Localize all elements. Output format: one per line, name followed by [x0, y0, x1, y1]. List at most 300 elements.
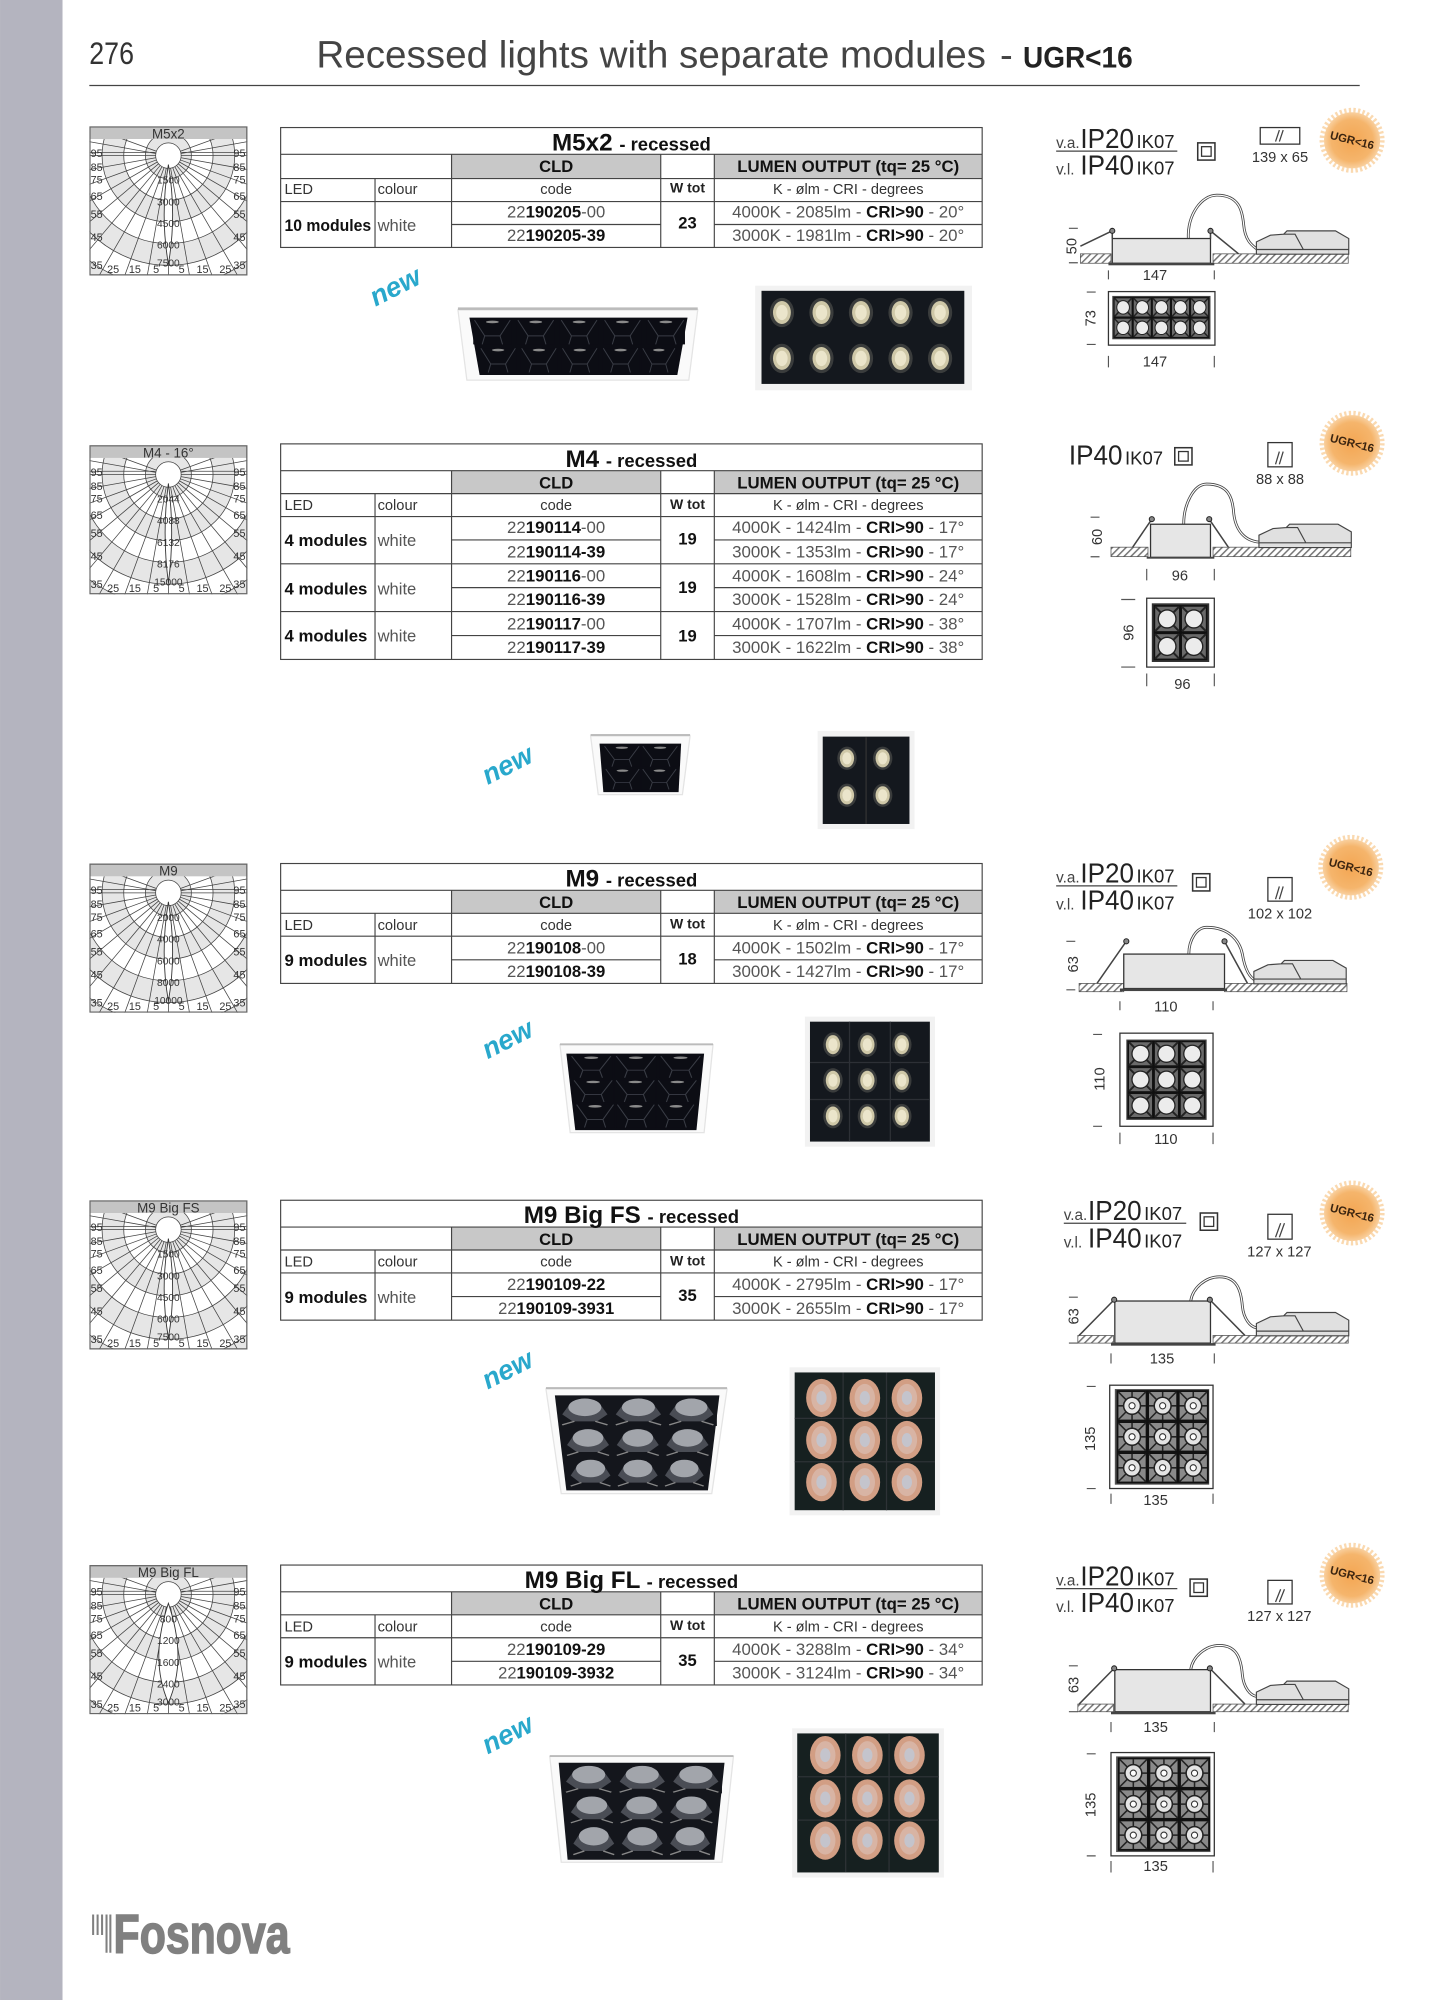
table: M4: 3000K - 1528lm - CRI>90 - 24°: [732, 590, 964, 609]
polar diagram: M5x2: 65: [91, 191, 103, 203]
polar diagram: M5x2: 25: [219, 264, 231, 276]
protection ratings: M9 Big FS: IK07: [1144, 1230, 1182, 1251]
polar diagram: M9 Big FS: [0, 1055, 344, 1405]
polar diagram: M5x2: 55: [91, 209, 103, 221]
polar diagram: M9 Big FS: 5: [153, 1338, 159, 1350]
table: M4: 22190116-00: [507, 567, 605, 586]
table: M5x2: code: [540, 182, 572, 198]
badge: UGR<16: UGR<16: [1329, 1203, 1375, 1225]
polar diagram: M9 Big FS: 55: [91, 1283, 103, 1295]
polar diagram: M9: 5: [179, 1001, 185, 1013]
polar diagram: M5x2: 95: [233, 148, 245, 160]
cut-out: M5x2: [1252, 128, 1308, 166]
protection ratings: M9: IP40: [1080, 884, 1134, 915]
polar diagram: M9 Big FL: 25: [219, 1703, 231, 1715]
polar diagram: M9 Big FS: 25: [107, 1338, 119, 1350]
polar diagram: M9 Big FS: 85: [233, 1236, 245, 1248]
photo: M4 side: [591, 734, 690, 795]
polar diagram: M5x2: 75: [91, 175, 103, 187]
polar diagram: M5x2: 1500: [157, 176, 180, 187]
side drawing: M4: 60: [1090, 529, 1106, 545]
polar diagram: M9 Big FS: M9 Big FS: [137, 1200, 200, 1215]
polar diagram: M5x2: M5x2: [152, 126, 185, 141]
top drawing: M5x2: 147: [1143, 355, 1167, 371]
polar diagram: M5x2: 85: [91, 162, 103, 174]
polar diagram: M9 Big FL: 1600: [157, 1658, 180, 1669]
polar diagram: M4: 15: [129, 583, 141, 595]
table: M9: M9 - recessed: [565, 865, 697, 892]
polar diagram: M9 Big FL: 5: [153, 1703, 159, 1715]
table: M9 Big FS: [281, 1200, 982, 1320]
cut-out: M9 Big FL: [1247, 1580, 1312, 1625]
polar diagram: M5x2: [0, 0, 344, 332]
protection ratings: M4: IP40: [1069, 439, 1122, 470]
polar diagram: M9 Big FL: 45: [91, 1671, 103, 1683]
side band: [0, 0, 63, 2000]
cut-out: M4: [1256, 443, 1304, 488]
polar diagram: M4: 5: [179, 583, 185, 595]
table: M9: 9 modules: [284, 951, 367, 970]
table: M9: code: [540, 918, 572, 934]
polar diagram: M9: 35: [91, 997, 103, 1009]
top drawing: M9: 110: [1093, 1067, 1109, 1091]
polar diagram: M4: 95: [91, 467, 103, 479]
polar diagram: M4: 25: [219, 583, 231, 595]
table: M4: LUMEN OUTPUT (tq= 25 °C): [737, 474, 959, 493]
photo: M9 Big FS side: [546, 1387, 727, 1494]
table: M9 Big FL: 3000K - 3124lm - CRI>90 - 34°: [732, 1664, 964, 1683]
top drawing: M4: [1121, 598, 1214, 693]
table: M4: 4000K - 1608lm - CRI>90 - 24°: [732, 567, 964, 586]
polar diagram: M9 Big FS: 65: [233, 1265, 245, 1277]
polar diagram: M9: 95: [233, 885, 245, 897]
side drawing: M9: 63: [1066, 956, 1082, 972]
polar diagram: M5x2: 55: [233, 209, 245, 221]
polar diagram: M4: M4 - 16°: [143, 445, 194, 460]
polar diagram: M9: 85: [91, 899, 103, 911]
polar diagram: M5x2: 65: [233, 191, 245, 203]
table: M5x2: M5x2 - recessed: [552, 130, 711, 157]
polar diagram: M9 Big FL: 75: [91, 1613, 103, 1625]
polar diagram: M9: 55: [91, 946, 103, 958]
table: M9 Big FL: M9 Big FL - recessed: [525, 1567, 738, 1594]
side drawing: M5x2: 147: [1143, 268, 1167, 284]
protection ratings: M4: [1069, 439, 1163, 470]
polar diagram: M9: 55: [233, 946, 245, 958]
polar diagram: M9: 6000: [157, 956, 180, 967]
protection ratings: M9 Big FL: IP20: [1080, 1560, 1134, 1591]
polar diagram: M5x2: 15: [129, 264, 141, 276]
protection ratings: M9: [1056, 858, 1177, 915]
badge: UGR<16: UGR<16: [1327, 857, 1374, 879]
table: M5x2: 22190205-00: [507, 202, 605, 221]
polar diagram: M5x2: 75: [233, 175, 245, 187]
top drawing: M9 Big FL: [1084, 1753, 1214, 1875]
polar diagram: M4: 85: [233, 481, 245, 493]
polar diagram: M9: 25: [219, 1001, 231, 1013]
side drawing: M9 Big FS: 63: [1066, 1308, 1082, 1324]
table: M9 Big FS: LED: [284, 1255, 313, 1271]
table: M9 Big FS: colour: [378, 1255, 418, 1271]
table: M9 Big FS: code: [540, 1255, 572, 1271]
top drawing: M5x2: 73: [1084, 310, 1100, 326]
protection ratings: M5x2: IK07: [1137, 131, 1175, 152]
polar diagram: M4: 75: [233, 494, 245, 506]
polar diagram: M9 Big FS: 4500: [157, 1293, 180, 1304]
polar diagram: M9 Big FS: 75: [91, 1249, 103, 1261]
polar diagram: M9 Big FS: 3000: [157, 1271, 180, 1282]
polar diagram: M9: 8000: [157, 978, 180, 989]
table: M9 Big FL: LED: [284, 1619, 313, 1635]
polar diagram: M9 Big FS: 95: [233, 1222, 245, 1234]
cut-out: M9 Big FS: [1247, 1214, 1312, 1260]
polar diagram: M9: 95: [91, 885, 103, 897]
polar diagram: M9 Big FS: 35: [91, 1334, 103, 1346]
side drawing: M9: 110: [1154, 999, 1178, 1015]
protection ratings: M9 Big FL: IK07: [1137, 1568, 1175, 1589]
badge: UGR<16: UGR<16: [1329, 1565, 1375, 1587]
protection ratings: M9: IK07: [1137, 866, 1175, 887]
table: M5x2: K - ølm - CRI - degrees: [773, 182, 923, 198]
polar diagram: M9 Big FS: 45: [91, 1306, 103, 1318]
page header: [89, 34, 1360, 85]
polar diagram: M9 Big FL: 55: [91, 1648, 103, 1660]
table: M9: 18: [678, 949, 697, 968]
polar diagram: M5x2: 35: [91, 260, 103, 272]
polar diagram: M9: 4000: [157, 935, 180, 946]
polar diagram: M9: 15: [196, 1001, 209, 1013]
new badge: new: [476, 1012, 539, 1065]
polar diagram: M9: 2000: [157, 913, 180, 924]
protection ratings: M9: IP20: [1080, 858, 1134, 889]
polar diagram: M4: 35: [91, 579, 103, 591]
table: M9 Big FS: 22190109-22: [507, 1275, 605, 1294]
table: M9: W tot: [670, 916, 705, 932]
polar diagram: M9 Big FS: 35: [233, 1334, 245, 1346]
polar diagram: M5x2: 4500: [157, 219, 180, 230]
polar diagram: M5x2: 35: [233, 260, 245, 272]
table: M9 Big FS: CLD: [539, 1230, 573, 1249]
photo: M5x2 front: [755, 286, 972, 390]
polar diagram: M4: 65: [91, 510, 103, 522]
polar diagram: M9 Big FS: 15: [129, 1338, 141, 1350]
table: M4: white: [377, 627, 416, 646]
polar diagram: M9 Big FS: 25: [219, 1338, 231, 1350]
icon: double square: [1175, 448, 1192, 465]
table: M5x2: [281, 128, 982, 247]
cut-out: M9: [1248, 878, 1312, 922]
polar diagram: M4: 25: [107, 583, 119, 595]
table: M9 Big FS: W tot: [670, 1252, 705, 1268]
polar diagram: M5x2: 5: [153, 264, 159, 276]
polar diagram: M9 Big FS: 95: [91, 1222, 103, 1234]
table: M4: 22190117-39: [507, 638, 605, 657]
table: M4: code: [540, 498, 572, 514]
table: M9 Big FS: 35: [678, 1286, 697, 1305]
protection ratings: M4: IK07: [1125, 447, 1163, 468]
side drawing: M5x2: [1065, 195, 1349, 284]
polar diagram: M4: 45: [91, 551, 103, 563]
table: M4: 22190114-39: [507, 542, 605, 561]
table: M4: white: [377, 531, 416, 550]
table: M9 Big FS: 22190109-3931: [498, 1299, 614, 1318]
table: M9 Big FL: W tot: [670, 1617, 705, 1633]
polar diagram: M9 Big FL: 95: [233, 1587, 245, 1599]
side drawing: M9 Big FL: [1066, 1645, 1349, 1736]
cut-out: M9 Big FL: 127 x 127: [1247, 1609, 1312, 1625]
photo: M4 front: [818, 731, 915, 829]
protection ratings: M9: v.l.: [1056, 896, 1075, 913]
badge: UGR<16: [1321, 837, 1381, 897]
table: M9 Big FL: 35: [678, 1651, 697, 1670]
polar diagram: M9: 75: [233, 912, 245, 924]
table: M4: W tot: [670, 496, 705, 512]
icon: double square: [1190, 1579, 1207, 1596]
page title: UGR<16: [1023, 42, 1133, 75]
polar diagram: M5x2: 3000: [157, 197, 180, 208]
polar diagram: M9 Big FL: 1200: [157, 1636, 180, 1647]
polar diagram: M9 Big FL: 65: [91, 1630, 103, 1642]
top drawing: M9 Big FS: 135: [1143, 1493, 1168, 1509]
polar diagram: M9: 25: [107, 1001, 119, 1013]
table: M9 Big FS: M9 Big FS - recessed: [524, 1202, 739, 1229]
table: M4: 4000K - 1424lm - CRI>90 - 17°: [732, 518, 964, 537]
badge: UGR<16: [1322, 1183, 1382, 1243]
protection ratings: M5x2: IP20: [1080, 123, 1134, 154]
polar diagram: M9 Big FS: 1500: [157, 1250, 180, 1261]
protection ratings: M9 Big FL: [1056, 1560, 1177, 1618]
side drawing: M9 Big FS: [1066, 1277, 1349, 1368]
table: M9: LED: [284, 918, 313, 934]
table: M5x2: 3000K - 1981lm - CRI>90 - 20°: [732, 226, 964, 245]
top drawing: M9: [1093, 1033, 1213, 1148]
table: M4: 4 modules: [284, 531, 367, 550]
page title: Recessed lights with separate modules: [316, 34, 986, 77]
polar diagram: M9 Big FL: 25: [107, 1703, 119, 1715]
table: M5x2: LUMEN OUTPUT (tq= 25 °C): [737, 157, 959, 176]
table: M9 Big FS: 4000K - 2795lm - CRI>90 - 17°: [732, 1275, 964, 1294]
polar diagram: M5x2: 85: [233, 162, 245, 174]
side drawing: M9 Big FL: 135: [1143, 1720, 1168, 1736]
polar diagram: M9 Big FL: 55: [233, 1648, 245, 1660]
table: M9: 4000K - 1502lm - CRI>90 - 17°: [732, 938, 964, 957]
table: M4: K - ølm - CRI - degrees: [773, 498, 923, 514]
polar diagram: M4: 55: [233, 528, 245, 540]
table: M4: 22190117-00: [507, 614, 605, 633]
table: M4: 4 modules: [284, 579, 367, 598]
side drawing: M9 Big FS: 135: [1150, 1352, 1174, 1368]
protection ratings: M9 Big FL: IP40: [1080, 1587, 1134, 1618]
polar diagram: M4: 65: [233, 510, 245, 522]
polar diagram: M9: [0, 718, 344, 1069]
polar diagram: M9 Big FS: 15: [196, 1338, 209, 1350]
photo: M9 side: [560, 1043, 713, 1133]
polar diagram: M9: 45: [91, 969, 103, 981]
table: M4: 3000K - 1353lm - CRI>90 - 17°: [732, 542, 964, 561]
polar diagram: M9 Big FL: 800: [160, 1614, 177, 1625]
protection ratings: M9: v.a.: [1056, 870, 1080, 887]
protection ratings: M9: IK07: [1137, 892, 1175, 913]
polar diagram: M9 Big FL: 15: [129, 1703, 141, 1715]
table: M4: 19: [678, 627, 697, 646]
protection ratings: M9 Big FL: v.a.: [1056, 1572, 1080, 1589]
table: M4: 3000K - 1622lm - CRI>90 - 38°: [732, 638, 964, 657]
logo: Fosnova: Fosnova: [114, 1903, 290, 1965]
table: M9 Big FL: [281, 1565, 982, 1685]
protection ratings: M9 Big FS: IP20: [1088, 1195, 1142, 1226]
top drawing: M9 Big FS: [1083, 1385, 1213, 1509]
table: M5x2: 4000K - 2085lm - CRI>90 - 20°: [732, 202, 964, 221]
protection ratings: M9 Big FS: v.a.: [1064, 1207, 1087, 1224]
table: M9 Big FS: LUMEN OUTPUT (tq= 25 °C): [737, 1230, 959, 1249]
new badge: new: [476, 1342, 539, 1395]
protection ratings: M5x2: IK07: [1137, 158, 1175, 179]
polar diagram: M4: [0, 300, 344, 650]
cut-out: M5x2: 139 x 65: [1252, 150, 1308, 166]
protection ratings: M9 Big FL: v.l.: [1056, 1599, 1075, 1616]
table: M9 Big FL: code: [540, 1619, 572, 1635]
side drawing: M9 Big FL: 63: [1066, 1677, 1082, 1693]
polar diagram: M9 Big FL: [0, 1420, 344, 1770]
table: M9 Big FL: 22190109-29: [507, 1640, 605, 1659]
table: M9: white: [377, 951, 416, 970]
polar diagram: M5x2: 25: [107, 264, 119, 276]
badge: UGR<16: [1322, 110, 1382, 170]
badge: UGR<16: UGR<16: [1329, 130, 1375, 152]
polar diagram: M4: 35: [233, 579, 245, 591]
polar diagram: M5x2: 15: [196, 264, 209, 276]
polar diagram: M9: 45: [233, 969, 245, 981]
polar diagram: M4: 15000: [154, 577, 183, 588]
table: M4: 4000K - 1707lm - CRI>90 - 38°: [732, 614, 964, 633]
polar diagram: M9 Big FL: 85: [91, 1601, 103, 1613]
table: M4: 22190116-39: [507, 590, 605, 609]
top drawing: M9 Big FS: 135: [1083, 1427, 1099, 1451]
polar diagram: M9 Big FS: 45: [233, 1306, 245, 1318]
polar diagram: M4: 4088: [157, 516, 180, 527]
top drawing: M4: 96: [1121, 624, 1137, 641]
cut-out: M4: 88 x 88: [1256, 472, 1304, 488]
table: M9 Big FS: 3000K - 2655lm - CRI>90 - 17°: [732, 1299, 964, 1318]
table: M9 Big FS: white: [377, 1288, 416, 1307]
polar diagram: M9 Big FL: 85: [233, 1601, 245, 1613]
table: M4: 4 modules: [284, 627, 367, 646]
table: M5x2: 10 modules: [284, 216, 371, 235]
table: M5x2: CLD: [539, 157, 573, 176]
polar diagram: M4: 55: [91, 528, 103, 540]
table: M9: [281, 864, 982, 983]
badge: UGR<16: UGR<16: [1329, 433, 1375, 455]
polar diagram: M9: 10000: [154, 996, 183, 1007]
polar diagram: M9 Big FS: 6000: [157, 1315, 180, 1326]
photo: M5x2 side: [458, 307, 698, 380]
polar diagram: M9: 65: [91, 928, 103, 940]
top drawing: M5x2: [1084, 292, 1215, 371]
polar diagram: M9 Big FS: 85: [91, 1236, 103, 1248]
table: M9 Big FL: colour: [378, 1619, 418, 1635]
table: M9 Big FS: 9 modules: [284, 1288, 367, 1307]
table: M9: CLD: [539, 893, 573, 912]
table: M9: 22190108-39: [507, 962, 605, 981]
protection ratings: M5x2: v.a.: [1056, 135, 1080, 152]
icon: double square: [1193, 874, 1210, 891]
polar diagram: M5x2: 45: [91, 232, 103, 244]
polar diagram: M9 Big FS: 65: [91, 1265, 103, 1277]
top drawing: M4: 96: [1174, 677, 1191, 693]
table: M9: 22190108-00: [507, 938, 605, 957]
polar diagram: M9: 75: [91, 912, 103, 924]
table: M4: 22190114-00: [507, 518, 605, 537]
polar diagram: M5x2: 6000: [157, 241, 180, 252]
protection ratings: M9 Big FS: IP40: [1088, 1222, 1142, 1253]
polar diagram: M4: 8176: [157, 560, 180, 571]
polar diagram: M9 Big FS: 7500: [157, 1333, 180, 1344]
polar diagram: M9 Big FL: 95: [91, 1587, 103, 1599]
polar diagram: M5x2: 45: [233, 232, 245, 244]
polar diagram: M4: 95: [233, 467, 245, 479]
polar diagram: M9 Big FS: 55: [233, 1283, 245, 1295]
polar diagram: M9 Big FL: 15: [196, 1703, 209, 1715]
table: M9: LUMEN OUTPUT (tq= 25 °C): [737, 893, 959, 912]
polar diagram: M9: M9: [159, 864, 178, 879]
table: M5x2: W tot: [670, 180, 705, 196]
top drawing: M9 Big FL: 135: [1143, 1859, 1168, 1875]
side drawing: M4: 96: [1172, 568, 1188, 584]
polar diagram: M9 Big FL: 45: [233, 1671, 245, 1683]
table: M9: K - ølm - CRI - degrees: [773, 918, 923, 934]
polar diagram: M9 Big FL: 75: [233, 1613, 245, 1625]
polar diagram: M9 Big FL: M9 Big FL: [138, 1565, 199, 1580]
polar diagram: M9: 5: [153, 1001, 159, 1013]
table: M9 Big FL: CLD: [539, 1595, 573, 1614]
icon: double square: [1200, 1213, 1218, 1230]
polar diagram: M4: 75: [91, 494, 103, 506]
table: M4: LED: [284, 498, 313, 514]
polar diagram: M4: 5: [153, 583, 159, 595]
top drawing: M9: 110: [1154, 1132, 1178, 1148]
new badge: new: [476, 738, 539, 790]
photo: M9 front: [805, 1017, 935, 1147]
polar diagram: M9: 65: [233, 928, 245, 940]
table: M4: 19: [678, 530, 697, 549]
table: M5x2: 23: [678, 213, 697, 232]
top drawing: M9 Big FL: 135: [1084, 1793, 1100, 1817]
polar diagram: M5x2: 7500: [157, 259, 180, 270]
new badge: new: [364, 260, 427, 312]
polar diagram: M4: 15: [196, 583, 209, 595]
protection ratings: M9 Big FS: v.l.: [1064, 1234, 1082, 1251]
table: M9 Big FL: 9 modules: [284, 1653, 367, 1672]
table: M9 Big FL: white: [377, 1653, 416, 1672]
table: M9 Big FL: 4000K - 3288lm - CRI>90 - 34°: [732, 1640, 964, 1659]
table: M5x2: colour: [378, 182, 418, 198]
polar diagram: M9: 35: [233, 997, 245, 1009]
polar diagram: M4: 6132: [157, 538, 180, 549]
side drawing: M5x2: 50: [1065, 238, 1081, 254]
polar diagram: M9 Big FL: 35: [91, 1699, 103, 1711]
side drawing: M4: [1090, 484, 1351, 584]
polar diagram: M4: 45: [233, 551, 245, 563]
polar diagram: M9: 85: [233, 899, 245, 911]
table: M4: white: [377, 579, 416, 598]
cut-out: M9 Big FS: 127 x 127: [1247, 1244, 1312, 1260]
table: M9 Big FL: 22190109-3932: [498, 1664, 614, 1683]
protection ratings: M5x2: IP40: [1080, 150, 1134, 181]
polar diagram: M4: 85: [91, 481, 103, 493]
table: M5x2: LED: [284, 182, 313, 198]
photo: M9 Big FS front: [790, 1367, 940, 1515]
cut-out: M9: 102 x 102: [1248, 906, 1312, 922]
